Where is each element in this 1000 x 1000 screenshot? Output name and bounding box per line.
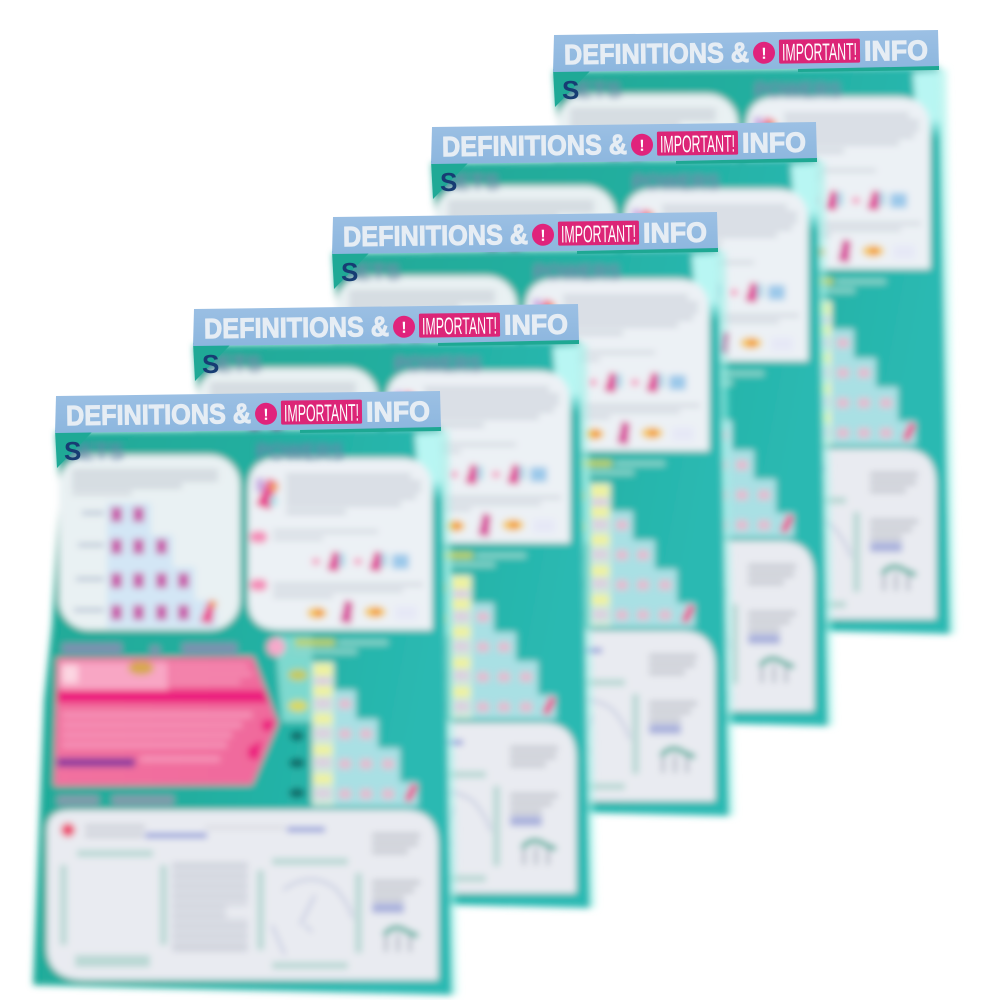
poster body: SETS [202, 352, 262, 377]
poster body [409, 159, 834, 726]
header banner [431, 122, 817, 199]
header banner [193, 304, 579, 381]
header banner [332, 212, 718, 289]
header banner: INFO [504, 309, 568, 341]
header banner: S [64, 436, 81, 466]
header banner [553, 30, 939, 107]
header banner: S [562, 75, 579, 105]
sheet 4 poster [409, 122, 834, 726]
header banner: S [440, 167, 457, 197]
header banner: ! [263, 407, 269, 424]
header banner: IMPORTANT! [782, 39, 857, 67]
section heading: sets: SETS [64, 439, 124, 464]
poster body: SETS [562, 78, 622, 103]
header banner: DEFINITIONS & [343, 219, 528, 252]
header banner: INFO [643, 217, 707, 249]
header banner: S [202, 349, 219, 379]
header banner: INFO [366, 396, 430, 428]
poster body [171, 341, 596, 908]
header banner: IMPORTANT! [284, 400, 359, 428]
header banner: ! [540, 228, 546, 245]
header banner: ! [401, 320, 407, 337]
header banner: INFO [742, 127, 806, 159]
header banner: IMPORTANT! [660, 131, 735, 159]
sheet 5: back poster [531, 30, 956, 634]
section heading: powers: POWERS [256, 439, 344, 464]
header banner: IMPORTANT! [422, 313, 497, 341]
poster body [310, 249, 735, 816]
sheet 2 poster [171, 304, 596, 908]
sheet 3 poster [310, 212, 735, 816]
sheet 1: front poster [33, 391, 458, 995]
poster body [531, 67, 956, 634]
header banner: DEFINITIONS & [442, 129, 627, 162]
header banner: S [341, 257, 358, 287]
header banner: DEFINITIONS & [66, 398, 251, 431]
header banner [55, 391, 441, 468]
poster body: POWERS [754, 78, 842, 103]
header banner: IMPORTANT! [561, 221, 636, 249]
poster body: SETS [440, 170, 500, 195]
header banner: ! [761, 46, 767, 63]
header banner: INFO [864, 35, 928, 67]
header banner: DEFINITIONS & [564, 37, 749, 70]
poster body [33, 428, 458, 995]
header banner: ! [639, 138, 645, 155]
poster body: POWERS [533, 260, 621, 285]
poster body: SETS [341, 260, 401, 285]
poster body: POWERS [632, 170, 720, 195]
poster body: POWERS [394, 352, 482, 377]
header banner: DEFINITIONS & [204, 311, 389, 344]
